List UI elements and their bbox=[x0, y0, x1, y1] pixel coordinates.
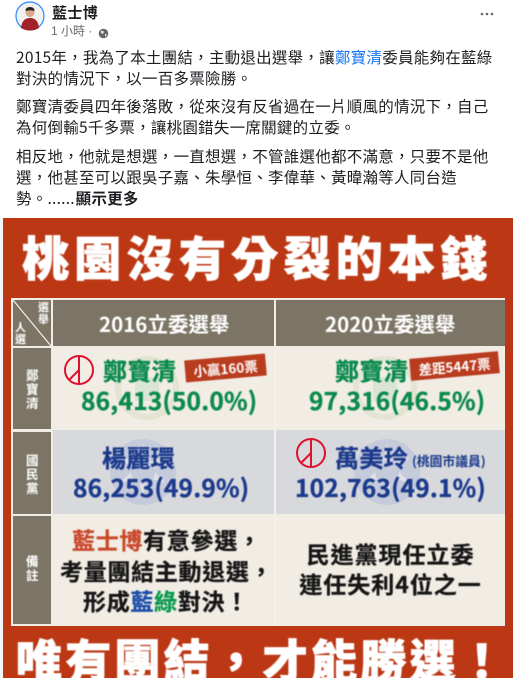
table header: 2020 bbox=[276, 300, 505, 346]
party emblem watermark bbox=[110, 439, 176, 505]
vote count: 97,316(46.5%) bbox=[309, 383, 485, 418]
title: 桃園沒有分裂的本錢 bbox=[22, 221, 493, 290]
row label: 鄭寶清: 鄭寶清 bbox=[26, 365, 39, 412]
post text: 對決的情況下，以一百多票險勝。 bbox=[16, 67, 252, 89]
vote count: 102,763(49.1%) bbox=[295, 470, 486, 505]
table header: 2016: 2016立委選舉 bbox=[99, 308, 229, 338]
note: 2020: 民進黨現任立委 bbox=[306, 536, 474, 570]
icon: vote stamp bbox=[64, 355, 94, 385]
row label: 備註 bbox=[13, 516, 51, 624]
cell: 2016 楊麗環 bbox=[53, 430, 274, 514]
row label: 鄭寶清 bbox=[13, 348, 51, 429]
comparison table bbox=[11, 298, 505, 626]
table grid line bbox=[274, 347, 276, 626]
candidate note: (桃園市議員) bbox=[412, 451, 486, 470]
note: 2020 bbox=[299, 536, 482, 600]
icon: vote stamp bbox=[296, 438, 326, 468]
party emblem watermark bbox=[353, 356, 417, 420]
row label: 國民黨: 國民黨 bbox=[26, 450, 39, 497]
post text bbox=[16, 46, 492, 209]
table header: corner cell bbox=[13, 300, 51, 346]
cell: 2020 鄭寶清 bbox=[309, 350, 500, 420]
avatar bbox=[15, 1, 45, 31]
post text: 為何倒輸5千多票，讓桃園錯失一席關鍵的立委。 bbox=[16, 116, 356, 138]
table header: 2016 bbox=[53, 300, 274, 346]
icon: globe bbox=[98, 28, 108, 38]
row label: 國民黨 bbox=[13, 432, 51, 514]
party emblem watermark bbox=[354, 439, 420, 505]
table header: corner cell: 人選 bbox=[15, 319, 26, 347]
post text: 鄭寶清委員四年後落敗，從來沒有反省過在一片順風的情況下，自己 bbox=[16, 95, 489, 117]
candidate name: 萬美玲 bbox=[335, 439, 408, 474]
candidate name: 鄭寶清 bbox=[335, 352, 408, 387]
timestamp: 1 小時 · bbox=[51, 24, 92, 38]
note: 2016: 形成藍綠對決！ bbox=[83, 583, 249, 617]
infographic poster bbox=[3, 218, 513, 678]
post text: 勢。...... 顯示更多 bbox=[16, 187, 139, 209]
party emblem watermark bbox=[115, 356, 179, 420]
post text: 相反地，他就是想選，一直想選，不管誰選他都不滿意，只要不是他 bbox=[16, 145, 489, 167]
note: 2016: 考量團結主動退選， bbox=[60, 553, 273, 587]
cell: 2020 萬美玲 bbox=[276, 430, 505, 514]
author name: 藍士博 bbox=[52, 2, 98, 23]
note: 2016: 藍士博有意參選， bbox=[72, 522, 262, 556]
post header bbox=[15, 1, 494, 38]
more menu icon bbox=[480, 12, 494, 16]
table header: 2020: 2020立委選舉 bbox=[325, 308, 455, 338]
cell: 2016 鄭寶清 bbox=[64, 352, 268, 420]
candidate name: 楊麗環 bbox=[102, 439, 175, 474]
left page margin bbox=[0, 218, 3, 678]
badge: margin: 差距5447票 bbox=[418, 353, 491, 379]
note: 2016 bbox=[60, 522, 273, 617]
badge: margin: 小贏160票 bbox=[193, 355, 258, 381]
vote count: 86,253(49.9%) bbox=[73, 470, 249, 505]
post text: 2015年，我為了本土團結，主動退出選舉，讓鄭寶清委員能夠在藍綠 bbox=[16, 46, 492, 68]
candidate name: 鄭寶清 bbox=[103, 352, 176, 387]
note: 2020: 連任失利4位之一 bbox=[299, 566, 482, 600]
vote count: 86,413(50.0%) bbox=[81, 383, 257, 418]
row label: 備註: 備註 bbox=[26, 551, 39, 584]
table header: corner cell: 選舉 bbox=[38, 299, 49, 327]
post text: 選，他甚至可以跟吳子嘉、朱學恒、李偉華、黃暐瀚等人同台造 bbox=[16, 166, 457, 188]
